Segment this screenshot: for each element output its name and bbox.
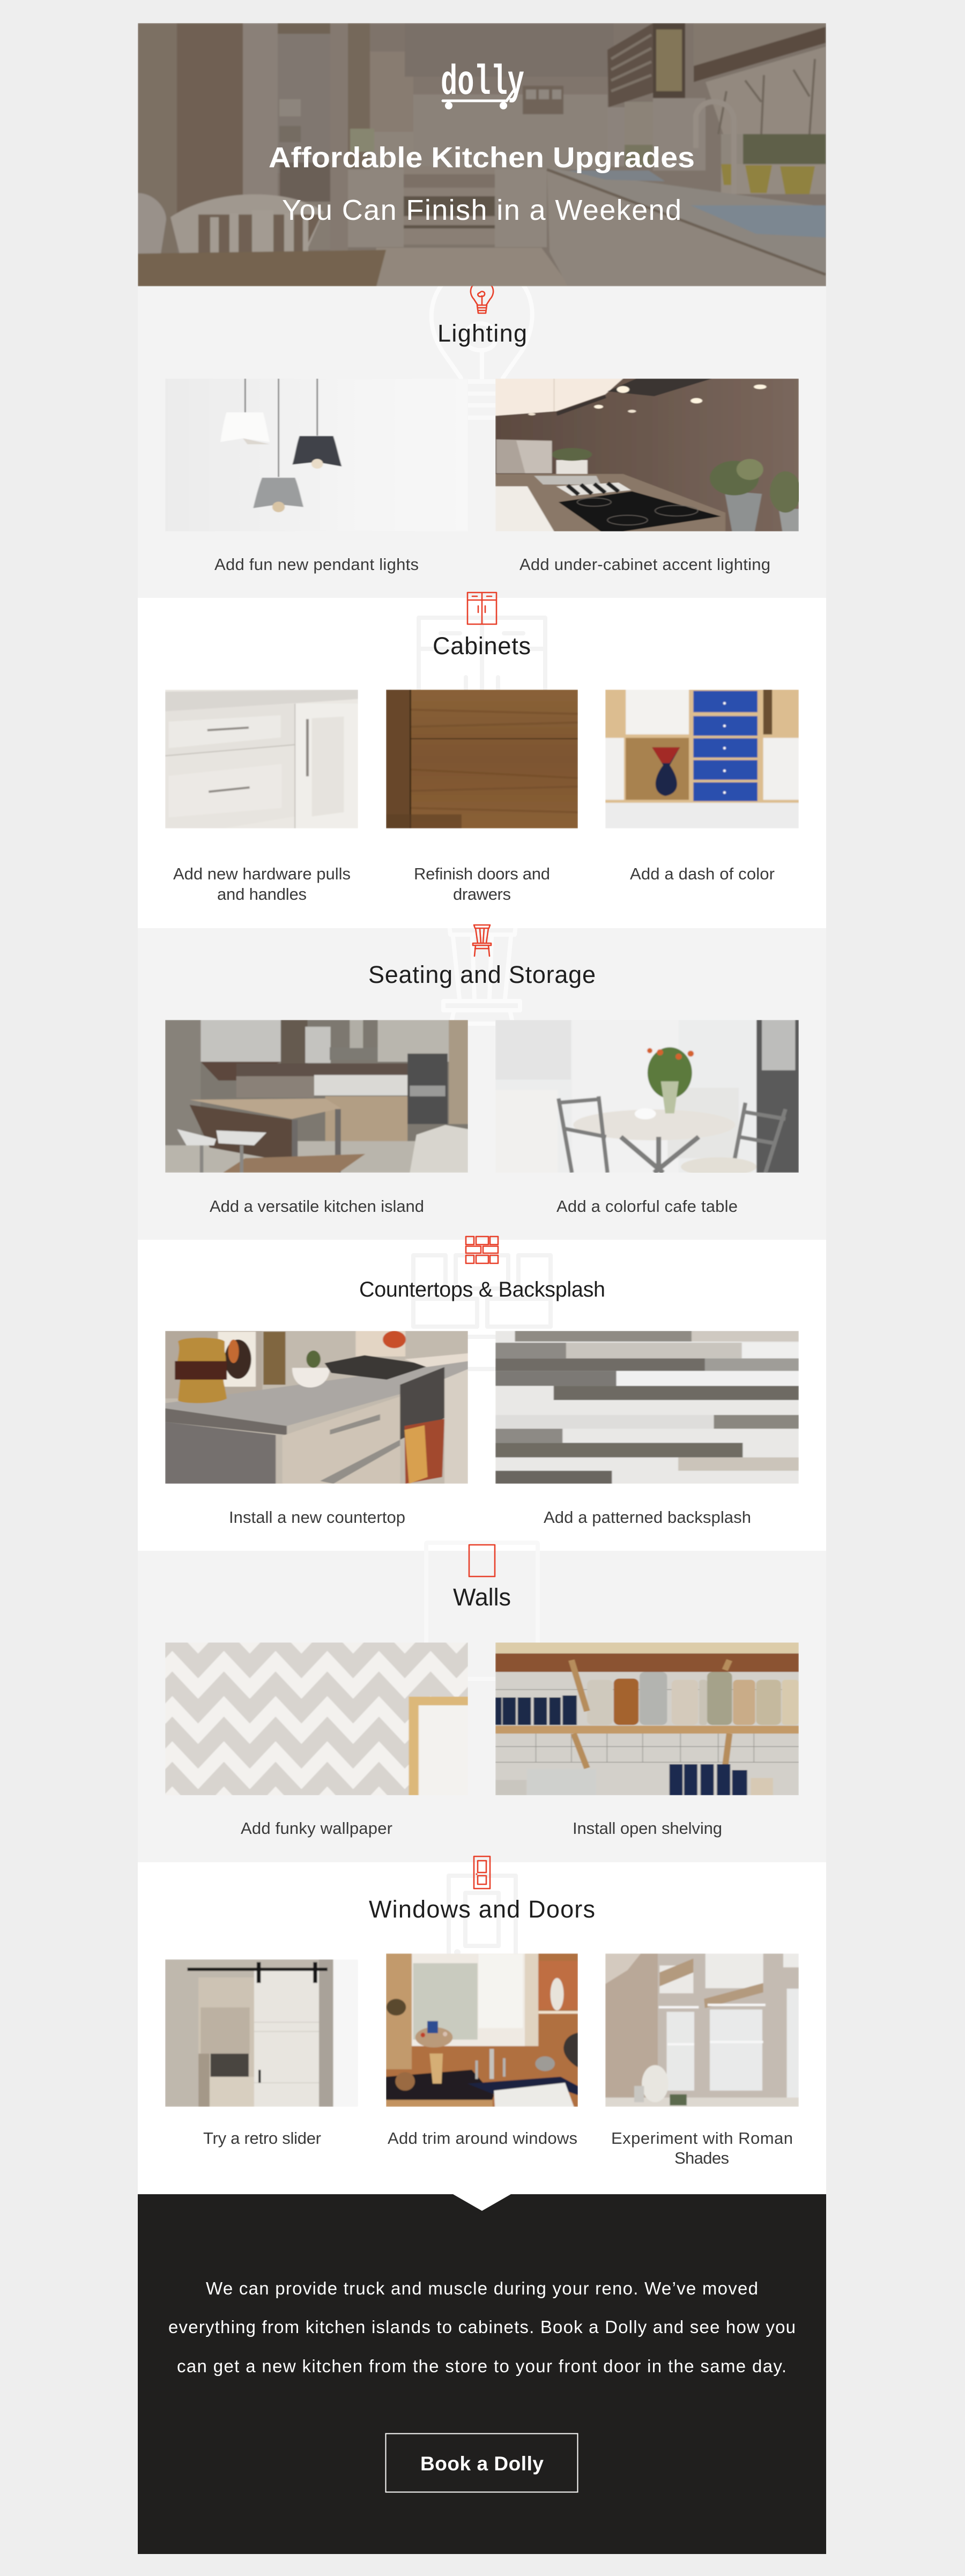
watermark: door: [449, 1876, 516, 1956]
photo: pendant lights: [243, 379, 342, 513]
heading: Windows and Doors: Windows and Doors: [369, 1896, 595, 1923]
heading: Lighting: Lighting: [437, 320, 527, 347]
photo: cabinet hardware: [165, 690, 358, 828]
button: Book a Dolly: Book a Dolly: [420, 2453, 544, 2475]
photo: kitchen backdrop: [138, 23, 826, 286]
caption: patterned backsplash: Add a patterned backsplash: [544, 1508, 751, 1527]
caption: window trim: Add trim around windows: [388, 2129, 577, 2148]
caption: hardware pulls: and handles: [217, 885, 307, 904]
photo: new countertop: [165, 1331, 468, 1484]
caption: retro slider: Try a retro slider: [203, 2129, 321, 2148]
button: Book a Dolly: [386, 2433, 578, 2492]
caption: roman shades: Shades: [674, 2149, 729, 2167]
caption: hardware pulls: Add new hardware pulls: [173, 864, 351, 883]
caption: open shelving: Install open shelving: [573, 1819, 722, 1838]
panel: header: [138, 23, 826, 286]
panel: walls: [138, 1543, 826, 1862]
caption: refinish doors: drawers: [453, 885, 511, 904]
photo: funky wallpaper: [165, 1642, 468, 1795]
photo: dash of color: [605, 690, 799, 828]
notch arrow: [453, 2194, 511, 2211]
caption: refinish doors: Refinish doors and: [414, 864, 550, 883]
body text: We can provide truck and muscle during your reno. We’ve moved: [206, 2278, 758, 2298]
body text: can get a new kitchen from the store to your front door in the same day.: [177, 2356, 786, 2376]
panel: cabinets: [138, 593, 826, 928]
panel: seating and storage: [138, 925, 826, 1240]
icon: light bulb: [471, 282, 493, 313]
logo: dolly: [441, 60, 524, 109]
panel: countertops and backsplash: [138, 1237, 826, 1551]
photo: patterned backsplash: [495, 1331, 799, 1484]
panel: windows and doors: [138, 1856, 826, 2195]
panel: call to action: [138, 2194, 826, 2554]
photo: roman shades: [605, 1953, 799, 2107]
photo: cafe table: [495, 1020, 799, 1173]
caption: accent lighting: Add under-cabinet accent lighting: [519, 555, 770, 574]
caption: funky wallpaper: Add funky wallpaper: [241, 1819, 392, 1838]
caption: dash of color: Add a dash of color: [630, 864, 775, 883]
heading: Countertops & Backsplash: Countertops & Backsplash: [359, 1278, 605, 1301]
icon: chair: [473, 925, 491, 956]
icon: cabinet: [467, 593, 496, 624]
caption: new countertop: Install a new countertop: [229, 1508, 405, 1527]
photo: refinished wood: [386, 690, 578, 828]
logo: dolly: dolly: [441, 60, 524, 107]
watermark: chair: [443, 925, 520, 1026]
caption: roman shades: Experiment with Roman: [611, 2129, 793, 2148]
watermark: wall: [426, 1543, 538, 1679]
title: Affordable Kitchen Upgrades: [269, 142, 695, 174]
icon: bricks: [466, 1237, 498, 1263]
photo: open shelving: [495, 1642, 799, 1795]
photo: under-cabinet lighting: [495, 379, 799, 531]
watermark: cabinet: [419, 618, 545, 690]
caption: pendant lights: Add fun new pendant lights: [214, 555, 419, 574]
heading: Walls: Walls: [453, 1583, 511, 1611]
photo: retro slider: [165, 1959, 357, 2107]
subtitle: You Can Finish in a Weekend: [282, 194, 681, 226]
photo: window trim: [386, 1953, 578, 2107]
heading: Cabinets: Cabinets: [433, 632, 531, 660]
caption: kitchen island: Add a versatile kitchen island: [210, 1197, 424, 1216]
watermark: light bulb: [432, 265, 532, 420]
caption: cafe table: Add a colorful cafe table: [556, 1197, 738, 1216]
photo: kitchen island: [165, 1020, 468, 1173]
body text: everything from kitchen islands to cabinets. Book a Dolly and see how you: [168, 2317, 796, 2337]
watermark: bricks: [413, 1255, 551, 1369]
heading: Seating and Storage: Seating and Storage: [368, 961, 596, 988]
panel: lighting: [138, 265, 826, 598]
icon: door: [474, 1856, 490, 1889]
icon: wall: [469, 1545, 495, 1576]
